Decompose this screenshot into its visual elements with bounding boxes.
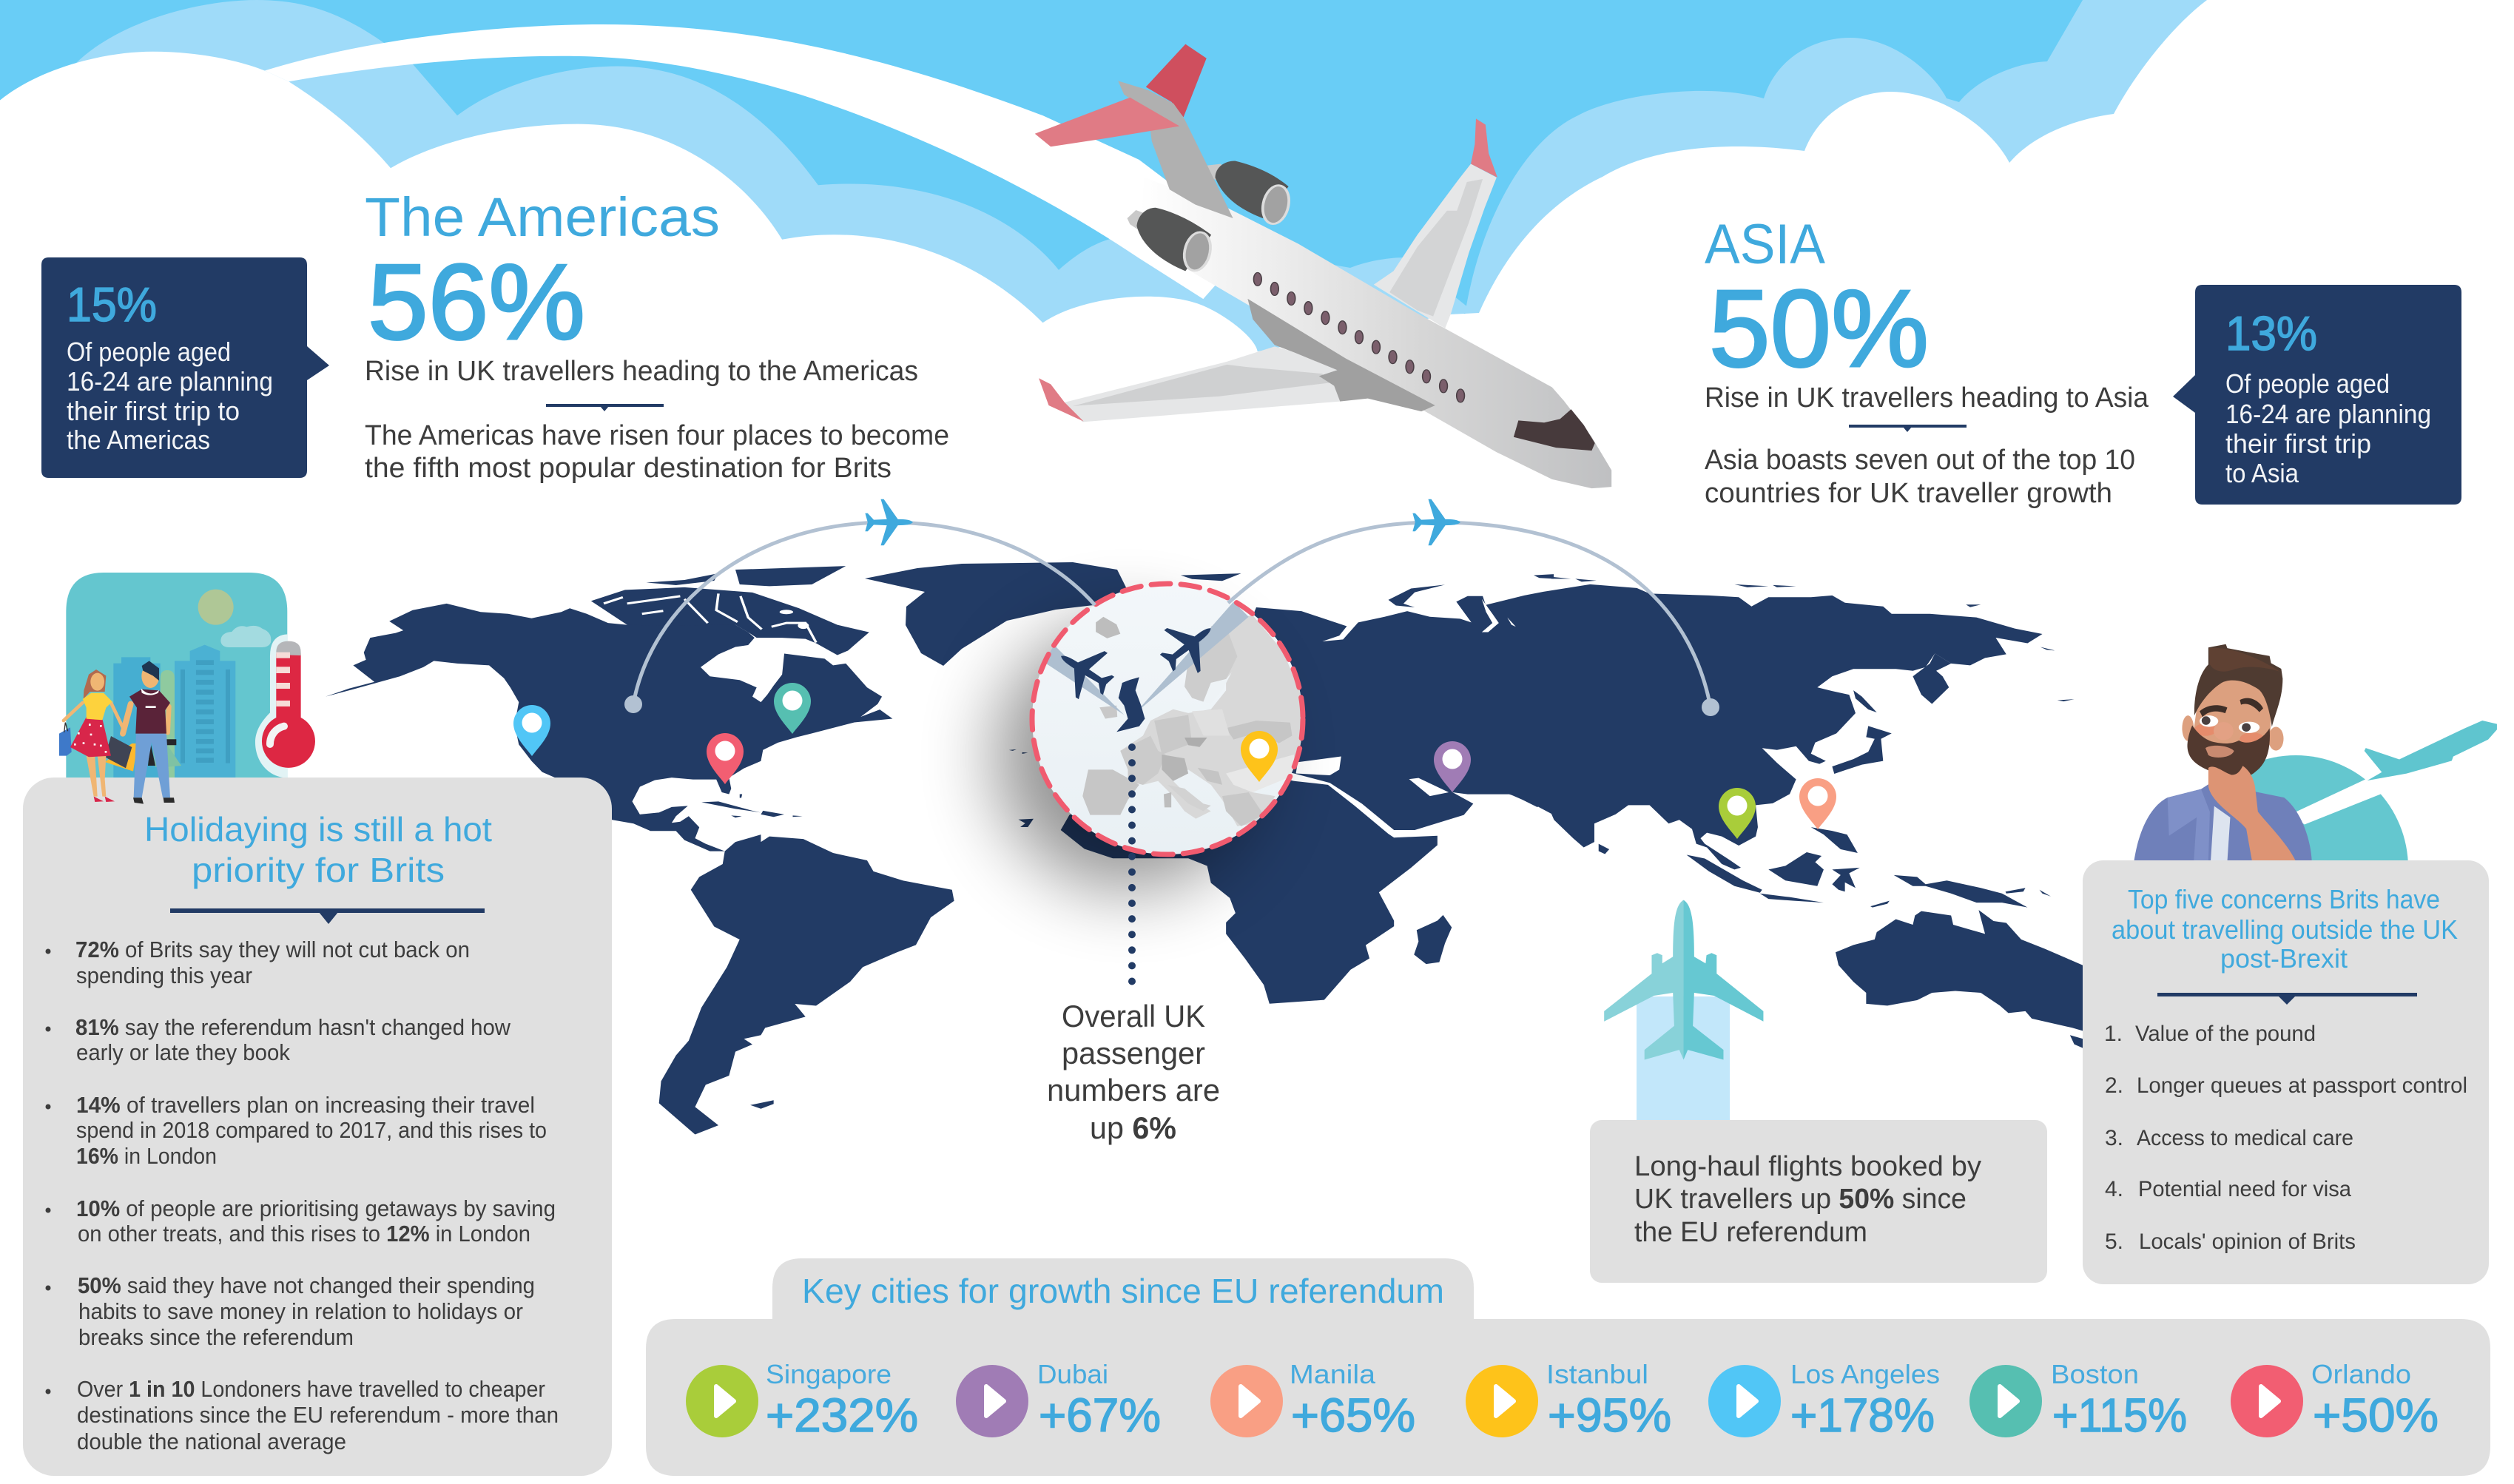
bullet list: breaks since the referendum — [78, 1324, 354, 1350]
bullet list: Over 1 in 10 Londoners have travelled to cheaper — [77, 1376, 545, 1402]
text: overall UK passenger numbers: numbers are — [1047, 1073, 1220, 1107]
dotted connector — [1128, 747, 1136, 984]
sky background with clouds — [0, 0, 2514, 510]
city: Boston: Boston — [2051, 1359, 2139, 1389]
text block: The Americas — [365, 186, 949, 484]
text: overall UK passenger numbers — [1047, 999, 1220, 1145]
description: countries for UK traveller growth — [1705, 478, 2112, 509]
callout text: to Asia — [2225, 458, 2299, 488]
pin: Los Angeles — [513, 705, 550, 756]
description — [1705, 445, 2135, 509]
bullet list: 10% of people are prioritising getaways by saving — [76, 1195, 556, 1221]
text: overall UK passenger numbers: passenger — [1062, 1036, 1205, 1070]
illustration: couple with shopping bags — [59, 661, 181, 804]
panel: Asia stat callout — [2173, 285, 2461, 505]
city: Singapore — [686, 1359, 918, 1442]
illustration: long-haul plane with vapour trail — [1604, 900, 1763, 1122]
flight arc to the Americas — [624, 522, 1095, 713]
heading: The Americas: The Americas — [365, 186, 720, 248]
description: the fifth most popular destination for Brits — [365, 453, 892, 484]
airplane illustration — [1035, 44, 1611, 488]
illustration: city and thermometer — [66, 573, 315, 778]
heading: about travelling outside the UK — [2112, 914, 2458, 945]
flight arc to Asia — [1228, 522, 1719, 716]
pin: Dubai — [1434, 741, 1471, 792]
bullet list: 50% said they have not changed their spending — [78, 1272, 535, 1298]
panel: top five concerns — [2083, 860, 2489, 1284]
city: Los Angeles: Los Angeles — [1790, 1359, 1940, 1389]
panel: long-haul flights — [1590, 1120, 2047, 1283]
city: Boston: +115% — [2052, 1389, 2187, 1442]
panel: holidaying is still a hot priority — [23, 778, 612, 1476]
numbered list: 2. — [2105, 1073, 2123, 1098]
map: Asia and Oceania — [1480, 575, 2117, 1048]
callout text — [2225, 368, 2431, 488]
Europe globe shadow — [995, 623, 1261, 889]
pin: Istanbul — [1241, 731, 1278, 782]
pin: Manila — [1799, 778, 1836, 829]
heading: Holidaying is still a hot — [144, 810, 492, 849]
bullet list: early or late they book — [76, 1039, 290, 1065]
subhead: Rise in UK travellers heading to Asia — [1705, 382, 2149, 414]
numbered list: Locals' opinion of Brits — [2139, 1230, 2356, 1254]
pin: Singapore — [1719, 788, 1756, 839]
city: Orlando — [2231, 1359, 2439, 1442]
callout text: their first trip to — [67, 396, 240, 426]
illustration: thinking man — [2134, 644, 2312, 861]
text — [1634, 1151, 1981, 1248]
city: Singapore: +232% — [766, 1389, 918, 1442]
numbered list: Potential need for visa — [2138, 1177, 2351, 1201]
city: Los Angeles — [1708, 1359, 1940, 1442]
bullet list: on other treats, and this rises to 12% in London — [78, 1221, 530, 1247]
flight path wedges — [1047, 643, 1124, 715]
numbered list: 1. — [2104, 1022, 2123, 1046]
panel: Americas stat callout — [41, 257, 329, 478]
icon: teal plane — [2365, 721, 2497, 780]
big number: 50%: 50% — [1709, 268, 1929, 390]
description: Asia boasts seven out of the top 10 — [1705, 445, 2135, 476]
bullet list: 16% in London — [76, 1143, 217, 1169]
pin: Orlando — [707, 733, 744, 784]
heading: post-Brexit — [2220, 943, 2348, 974]
description — [365, 420, 949, 484]
heading: Top five concerns Brits have — [2128, 884, 2440, 914]
Europe map detail — [1047, 601, 1307, 826]
numbered list: Access to medical care — [2137, 1126, 2353, 1150]
city: Boston — [1969, 1359, 2187, 1442]
city: Istanbul — [1466, 1359, 1671, 1442]
panel: key cities for growth — [646, 1258, 2490, 1476]
illustration: teal circle and plane — [2083, 721, 2497, 980]
big number: 56%: 56% — [368, 242, 585, 362]
callout text: 16-24 are planning — [67, 366, 273, 397]
heading — [144, 810, 492, 889]
city: Istanbul: +95% — [1548, 1389, 1671, 1442]
bullet list: spending this year — [76, 962, 252, 988]
numbered list: Longer queues at passport control — [2137, 1073, 2467, 1098]
city: Orlando: +50% — [2313, 1389, 2439, 1442]
icon: plane on Asia arc — [1412, 499, 1460, 545]
text: the EU referendum — [1634, 1217, 1867, 1248]
text: Long-haul flights booked by — [1634, 1151, 1981, 1182]
icon: plane outbound to Asia — [1150, 607, 1227, 684]
city: Dubai: Dubai — [1037, 1359, 1108, 1389]
text block: Asia — [1705, 213, 2149, 509]
bullet list: habits to save money in relation to holidays or — [78, 1298, 523, 1324]
map: Europe, Middle East and Africa — [1009, 573, 1554, 1004]
city: Manila — [1210, 1359, 1415, 1442]
city: Singapore: Singapore — [766, 1359, 892, 1389]
bullet list: 81% say the referendum hasn't changed how — [75, 1014, 511, 1040]
map: Americas — [326, 566, 954, 1135]
numbered list: Value of the pound — [2135, 1022, 2316, 1046]
heading: ASIA: ASIA — [1705, 213, 1825, 276]
map: Greenland — [865, 562, 1139, 666]
numbered list: 3. — [2105, 1126, 2123, 1150]
bullet list: spend in 2018 compared to 2017, and this rises to — [76, 1117, 547, 1143]
callout text: their first trip — [2225, 428, 2371, 459]
city: Istanbul: Istanbul — [1546, 1359, 1648, 1389]
city: Orlando: Orlando — [2311, 1359, 2411, 1389]
numbered list: 5. — [2105, 1230, 2123, 1254]
description: The Americas have risen four places to become — [365, 420, 949, 451]
bullet list: destinations since the EU referendum - more than — [77, 1402, 559, 1428]
subhead: Rise in UK travellers heading to the Americas — [365, 356, 918, 387]
heading: Key cities for growth since EU referendum — [802, 1272, 1444, 1310]
icon: plane on Americas arc — [865, 499, 913, 545]
pin: Boston — [774, 683, 811, 734]
city: Los Angeles: +178% — [1790, 1389, 1935, 1442]
icon: UK — [1116, 677, 1145, 732]
callout text: Of people aged — [2225, 368, 2390, 399]
text: overall UK passenger numbers: up 6% — [1090, 1110, 1176, 1145]
icon: thermometer — [255, 634, 315, 778]
world map — [326, 562, 2117, 1135]
callout text: the Americas — [67, 425, 210, 455]
numbered list — [2104, 1022, 2467, 1254]
numbered list: 4. — [2105, 1177, 2123, 1201]
heading: priority for Brits — [192, 851, 445, 889]
city: Manila: +65% — [1291, 1389, 1415, 1442]
callout text: 16-24 are planning — [2225, 399, 2431, 429]
icon: plane outbound to Americas — [1047, 633, 1123, 709]
stat: 15%: 15% — [67, 277, 157, 331]
text: overall UK passenger numbers: Overall UK — [1062, 999, 1205, 1033]
text: UK travellers up 50% since — [1634, 1184, 1967, 1215]
callout text: Of people aged — [67, 337, 231, 367]
bullet list — [46, 937, 559, 1454]
city: Dubai — [956, 1359, 1161, 1442]
bullet list: double the national average — [77, 1429, 346, 1454]
city: Dubai: +67% — [1039, 1389, 1161, 1442]
callout text — [67, 337, 273, 455]
heading — [2112, 884, 2458, 974]
city: Manila: Manila — [1290, 1359, 1376, 1389]
bullet list: 72% of Brits say they will not cut back on — [75, 937, 470, 962]
Europe zoom circle — [1032, 584, 1307, 854]
bullet list: 14% of travellers plan on increasing their travel — [76, 1092, 535, 1118]
stat: 13%: 13% — [2225, 306, 2317, 360]
